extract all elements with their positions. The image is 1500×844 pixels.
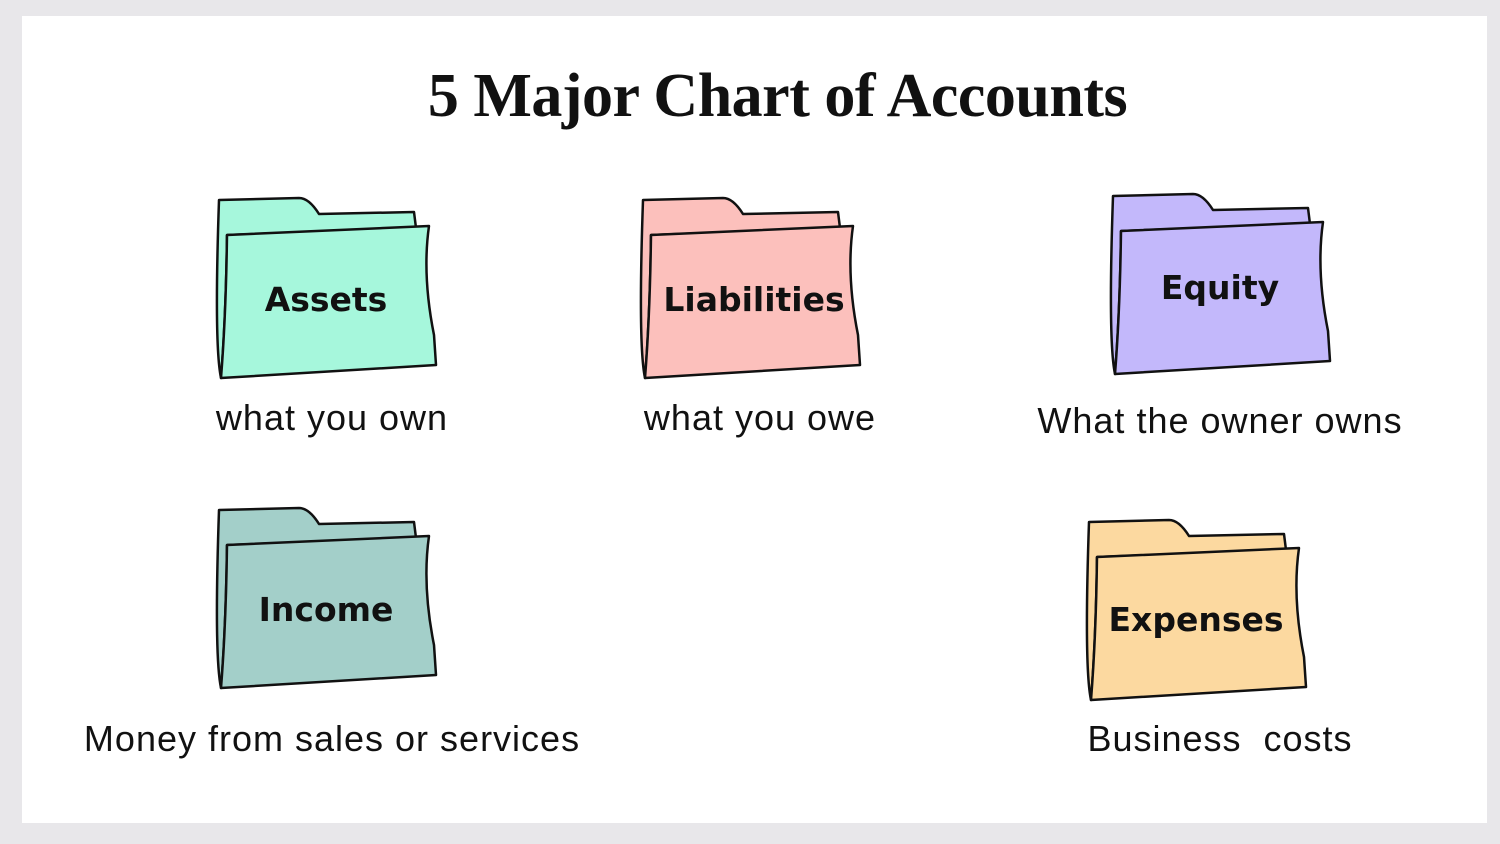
folder: equity xyxy=(1111,194,1330,374)
caption: equity: What the owner owns xyxy=(1037,400,1403,441)
title: 5 Major Chart of Accounts xyxy=(428,62,1127,130)
folder: assets: Assets xyxy=(265,280,387,319)
folder: liabilities xyxy=(641,198,860,378)
folder: equity: Equity xyxy=(1161,268,1279,307)
folder: expenses xyxy=(1087,520,1306,700)
caption: expenses: Business costs xyxy=(1087,718,1353,759)
caption: assets: what you own xyxy=(216,397,448,438)
folder: assets xyxy=(217,198,436,378)
folder: liabilities: Liabilities xyxy=(663,280,845,319)
caption: income: Money from sales or services xyxy=(84,718,580,759)
folder: income: Income xyxy=(259,590,393,629)
folder: expenses: Expenses xyxy=(1108,600,1284,639)
caption: liabilities: what you owe xyxy=(644,397,876,438)
folder: income xyxy=(217,508,436,688)
